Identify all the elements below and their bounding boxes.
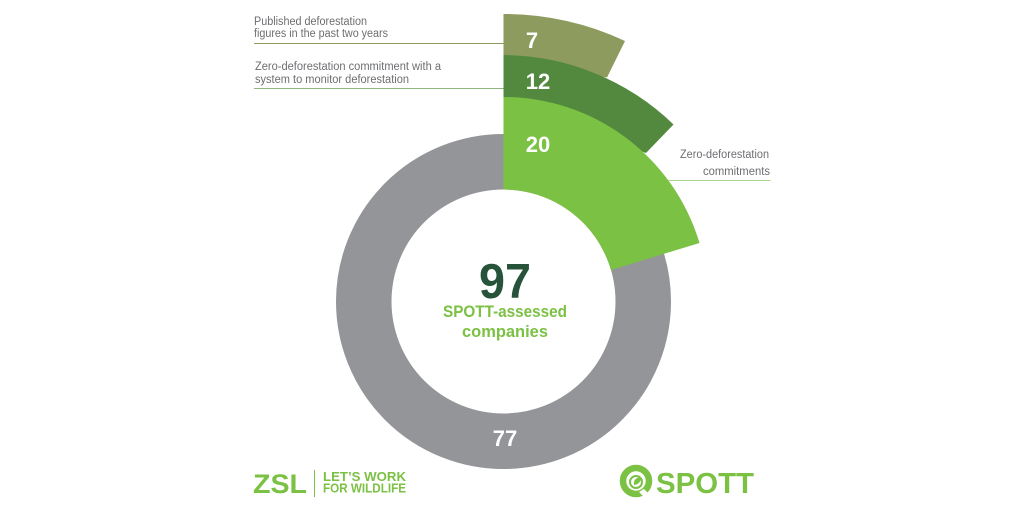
label: commitment with monitoring system: Zero-deforestation commitment with a [255,61,442,73]
center caption: SPOTT-assessed [443,302,567,321]
sector: commitment with monitoring system [504,55,674,153]
center caption [443,302,567,341]
value: 7: 7 [526,28,538,53]
value: 12: 12 [526,69,550,94]
sector: zero-deforestation commitments [504,97,700,270]
label: published deforestation figures: figures in the past two years [254,28,388,40]
logo: ZSL [253,469,406,499]
donut ring: all assessed companies [364,162,643,441]
label: published deforestation figures [254,16,504,44]
logo: ZSL: LET’S WORK [323,470,406,484]
total number: 97 [479,255,531,309]
logo: ZSL: FOR WILDLIFE [323,482,406,496]
label: commitment with monitoring system [254,61,504,88]
value: 77: 77 [493,426,517,451]
value: 20: 20 [526,132,550,157]
label: zero-deforestation commitments: commitments [703,166,770,178]
chart: radial deforestation funnel [364,14,700,451]
logo: ZSL: ZSL [253,469,307,499]
logo: SPOTT: SPOTT [656,468,754,500]
label: commitment with monitoring system: system to monitor deforestation [255,74,409,86]
center caption: companies [462,322,548,341]
label: zero-deforestation commitments [668,149,770,180]
sector: published deforestation figures [504,14,625,78]
label: zero-deforestation commitments: Zero-deforestation [680,149,769,161]
center total: 97 companies [443,255,567,341]
label: published deforestation figures: Published deforestation [254,16,367,28]
icon: magnifier with leaf [623,468,652,497]
